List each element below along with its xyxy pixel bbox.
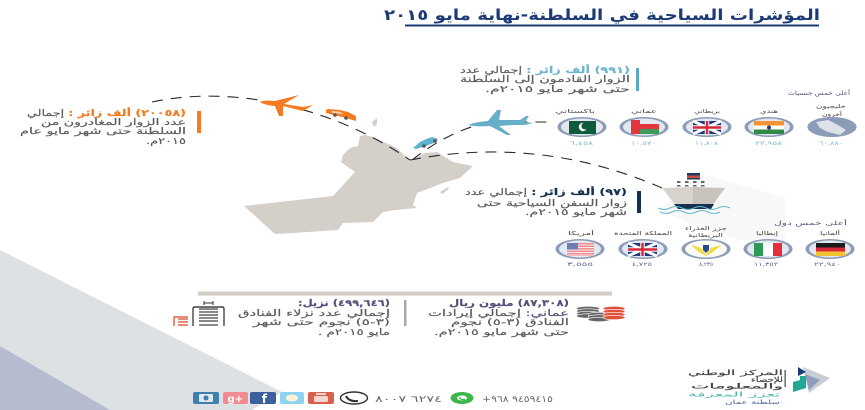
flag: Italy: ١١,٣٥٢ — [754, 262, 778, 268]
text: hotel revenue — [428, 299, 569, 338]
text: cruise visitors: (٩٧) ألف زائر : إجمالي عدد — [465, 186, 627, 198]
text: hotel guests: إجمالي عدد نزلاء الفنادق — [238, 309, 390, 319]
text: hotel revenue: حتى شهر مايو ٢٠١٥م. — [434, 328, 569, 338]
flag: Oman: ١٠,٥٧٠ — [631, 141, 656, 147]
icon: whatsapp — [450, 392, 474, 404]
map of Oman — [244, 118, 473, 234]
icon: facebook — [250, 392, 276, 406]
text: whatsapp number: +٩٦٨ ٩٤٥٩٤١٥ — [482, 395, 553, 405]
text: total departures: السلطنة حتى شهر مايو عام — [20, 127, 186, 137]
flag: British Virgin Islands — [682, 226, 730, 268]
flag: India: هندي — [760, 109, 778, 115]
text: toll-free number: ٨٠٠٧ ٦٢٧٤ — [375, 395, 442, 405]
flag: UK — [682, 109, 732, 147]
flag: Gulf: ٦٠,٨٨٠ — [819, 141, 843, 147]
title: المؤشرات السياحية في السلطنة-نهاية مايو ٢٠١٥ — [384, 6, 820, 24]
flag: Gulf — [808, 104, 856, 147]
text: total departures: (٢٠٠٥٨) ألف زائر : إجمالي — [27, 107, 186, 119]
text: hotel revenue: عماني: إجمالي إيرادات — [428, 309, 569, 319]
icon: google plus — [223, 392, 248, 405]
ship shadow — [660, 174, 785, 240]
text: hotel guests: (٤٩٩,٦٤٦) نزيل: — [298, 299, 390, 309]
panel: top countries — [556, 226, 854, 268]
flag: British Virgin Islands: ٨,٢٣٥ — [699, 262, 713, 268]
vertical divider — [404, 300, 406, 326]
text: total departures: ٢٠١٥م. — [146, 137, 186, 147]
text: cruise visitors: زوار السفن السياحية حتى — [477, 199, 627, 209]
flag: USA — [556, 229, 604, 268]
flag: Pakistan: ٦,٤٥٨ — [570, 141, 593, 147]
panel: top nationalities — [555, 104, 856, 147]
text: hotel guests: (٣-٥) نجوم حتى شهر — [251, 318, 390, 328]
text: total arrivals: الزوار القادمون إلى السلطنة — [460, 75, 630, 85]
flag: Germany: ألمانيا — [820, 229, 841, 237]
logo text: المركز الوطني — [688, 369, 783, 377]
flag: British Virgin Islands: جزر العذراء — [685, 226, 727, 232]
flag: Gulf: خليجيون — [816, 104, 846, 110]
flag: Oman — [620, 109, 668, 147]
flag: India: ٢٢,٩٥٨ — [755, 141, 782, 147]
flag: United Kingdom — [614, 230, 673, 268]
social icons — [193, 392, 334, 406]
icon: orange plane — [260, 95, 313, 116]
text: total arrivals — [460, 64, 630, 95]
arrivals accent bar — [636, 68, 639, 91]
icon: twitter — [280, 392, 304, 404]
flag: Pakistan — [555, 108, 606, 147]
icon: youtube — [308, 392, 334, 404]
flag: British Virgin Islands: البريطانية — [688, 233, 724, 239]
flag: Italy: إيطاليا — [756, 231, 779, 237]
flag: Germany: ٢٢,٩٤٠ — [814, 262, 841, 268]
flag: Germany — [806, 229, 854, 268]
text: total departures: عدد الزوار المغادرون من — [41, 118, 186, 128]
text: cruise visitors — [465, 186, 627, 218]
icon: hotel — [174, 301, 224, 326]
flag: UK: بريطاني — [694, 109, 721, 115]
logo mark — [793, 367, 830, 393]
text: hotel revenue: (٨٧,٣٠٨) مليون ريال — [449, 299, 569, 309]
logo — [688, 367, 830, 406]
background triangle — [0, 250, 282, 410]
flag: India — [744, 109, 794, 147]
text: total arrivals: حتى شهر مايو ٢٠١٥م. — [485, 85, 630, 95]
icon: coins — [576, 306, 625, 322]
icon: facebook: f — [262, 392, 268, 406]
logo text: والمعلومات — [691, 382, 783, 390]
text: hotel guests: مايو ٢٠١٥م . — [318, 328, 390, 338]
flag: United Kingdom: ٤,٧٢٥ — [632, 262, 652, 268]
flag: United Kingdom: المملكة المتحدة — [614, 230, 673, 237]
heading: top five countries: أعلى خمس دول — [774, 219, 848, 227]
flag: USA: ٣,٥٥٥ — [567, 262, 593, 268]
cruise accent bar — [637, 191, 641, 213]
text: hotel revenue: الفنادق (٣-٥) نجوم — [451, 318, 569, 328]
icon: blue car — [413, 137, 438, 149]
logo text: تعزز المعرفة — [688, 390, 780, 398]
flag: UK: ١١,٨٠٨ — [695, 141, 718, 147]
text: cruise visitors: شهر مايو ٢٠١٥م. — [525, 208, 627, 218]
text: total arrivals: (٩٩١) ألف زائر : إجمالي عدد — [460, 64, 630, 76]
icon: cruise ship — [658, 173, 730, 214]
dashed route: departures — [152, 96, 410, 160]
text: total departures — [20, 107, 186, 147]
text: hotel guests — [238, 299, 390, 338]
flag: Pakistan: باكستاني — [555, 108, 596, 115]
logo text: سلطنة عمان — [725, 399, 780, 406]
flag: USA: أمريكا — [568, 229, 595, 237]
logo text: للإحصاء — [751, 376, 783, 384]
dashed route: arrivals — [412, 122, 548, 160]
dashed route: cruise ships — [410, 152, 662, 188]
flag: Italy — [744, 231, 792, 268]
icon: google plus: g+ — [227, 394, 243, 405]
flag: Gulf: آخرون — [822, 111, 843, 118]
icon: orange car — [326, 109, 356, 121]
flag: Oman: عماني — [631, 109, 657, 115]
icon: phone — [340, 392, 368, 404]
departures accent bar — [197, 111, 201, 133]
icon: instagram — [193, 392, 219, 404]
logo text — [688, 369, 783, 406]
icon: blue plane — [468, 110, 533, 135]
heading: top five nationalities: أعلى خمس جنسيات — [788, 89, 850, 97]
divider bar — [198, 292, 612, 296]
